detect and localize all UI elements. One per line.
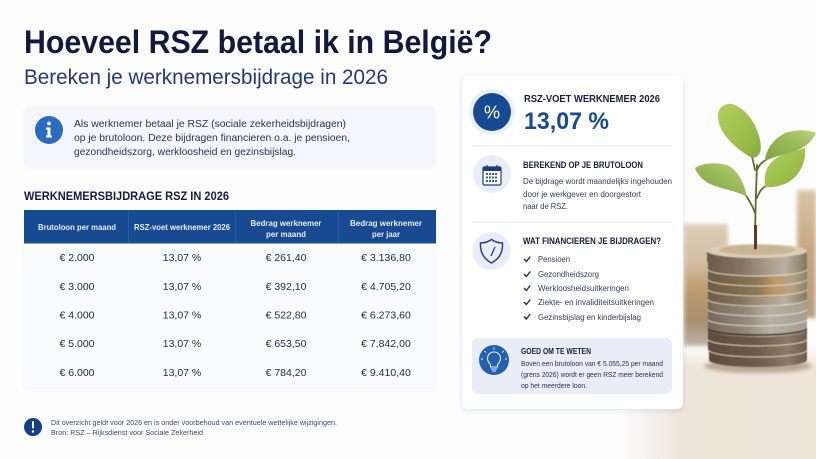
checklist: Werkloosheidsuitkeringen bbox=[538, 283, 629, 293]
row 4000: € 522,80 bbox=[266, 310, 307, 322]
row 6000: € 6.000 bbox=[59, 367, 95, 379]
rate label: RSZ-VOET WERKNEMER 2026 bbox=[524, 94, 661, 105]
row 3000 bbox=[59, 281, 411, 293]
table header: RSZ-voet werknemer 2026 bbox=[134, 222, 230, 232]
row 5000: 13,07 % bbox=[163, 338, 201, 350]
checklist: Gezondheidszorg bbox=[538, 269, 599, 279]
callout text bbox=[521, 359, 663, 390]
block text: De bijdrage wordt maandelijks ingehouden bbox=[523, 176, 672, 186]
callout text: Boven een brutoloon van € 5.055,25 per maand bbox=[521, 359, 663, 368]
funding block bbox=[472, 232, 661, 322]
checklist: Ziekte- en invaliditeitsuitkeringen bbox=[538, 297, 654, 307]
table: werknemersbijdrage bbox=[24, 210, 436, 388]
table header: Bedrag werknemer bbox=[250, 218, 322, 228]
block heading: BEREKEND OP JE BRUTOLOON bbox=[523, 160, 643, 170]
footnote text bbox=[51, 418, 337, 437]
row 2000 bbox=[59, 252, 411, 264]
leaves bbox=[718, 104, 761, 158]
icon: exclamation bbox=[24, 418, 42, 436]
intro text bbox=[74, 118, 350, 158]
row 4000: € 4.000 bbox=[59, 310, 95, 322]
row 5000: € 7.842,00 bbox=[361, 338, 411, 350]
footnote text: Bron: RSZ – Rijksdienst voor Sociale Zekerheid bbox=[51, 428, 203, 437]
block text: naar de RSZ. bbox=[523, 201, 568, 211]
checklist: Gezinsbijslag en kinderbijslag bbox=[538, 312, 641, 322]
table header: per jaar bbox=[372, 229, 401, 239]
row 6000 bbox=[59, 367, 411, 379]
block text: door je werkgever en doorgestort bbox=[523, 189, 642, 199]
seedling stem bbox=[745, 157, 766, 249]
intro text: op je brutoloon. Deze bijdragen financieren o.a. je pensioen, bbox=[74, 132, 350, 144]
callout heading: GOED OM TE WETEN bbox=[521, 347, 591, 356]
intro text: gezondheidszorg, werkloosheid en gezinsbijslag. bbox=[74, 146, 296, 158]
row 5000: € 5.000 bbox=[59, 338, 95, 350]
panel: intro info box bbox=[24, 106, 436, 167]
row 3000: € 4.705,20 bbox=[361, 281, 411, 293]
intro text: Als werknemer betaal je RSZ (sociale zekerheidsbijdragen) bbox=[74, 118, 346, 130]
row 2000: € 261,40 bbox=[266, 252, 307, 264]
row 6000: € 784,20 bbox=[266, 367, 307, 379]
icon: calendar bbox=[473, 155, 511, 193]
icon: percent: % bbox=[484, 102, 500, 122]
callout: good to know bbox=[472, 338, 672, 394]
icon: percent bbox=[469, 89, 515, 135]
row 6000: 13,07 % bbox=[163, 367, 201, 379]
gross salary block bbox=[473, 155, 672, 211]
table rows bbox=[59, 252, 411, 379]
checklist bbox=[524, 254, 654, 322]
row 4000: 13,07 % bbox=[163, 310, 201, 322]
block heading: WAT FINANCIEREN JE BIJDRAGEN? bbox=[523, 236, 661, 246]
table header bbox=[24, 210, 436, 244]
coin stack bbox=[707, 244, 807, 367]
row 5000 bbox=[59, 338, 411, 350]
table header: per maand bbox=[266, 229, 306, 239]
row 4000 bbox=[59, 310, 411, 322]
row 2000: € 2.000 bbox=[59, 252, 95, 264]
row 2000: 13,07 % bbox=[163, 252, 201, 264]
table header: Brutoloon per maand bbox=[38, 222, 116, 232]
block text bbox=[523, 176, 672, 211]
checklist: Pensioen bbox=[538, 254, 570, 264]
row 3000: € 3.000 bbox=[59, 281, 95, 293]
icon: shield bbox=[472, 232, 510, 270]
row 3000: € 392,10 bbox=[266, 281, 307, 293]
row 5000: € 653,50 bbox=[266, 338, 307, 350]
icon: light bulb bbox=[479, 345, 509, 375]
callout text: (grens 2026) wordt er geen RSZ meer berekend bbox=[521, 370, 663, 379]
footnote text: Dit overzicht geldt voor 2026 en is onder voorbehoud van eventuele wettelijke wijzigingen. bbox=[51, 418, 337, 427]
title: Hoeveel RSZ betaal ik in België? bbox=[24, 24, 492, 60]
rate value: 13,07 % bbox=[524, 108, 609, 135]
panel: side card bbox=[462, 76, 683, 409]
row 4000: € 6.273,60 bbox=[361, 310, 411, 322]
row 6000: € 9.410,40 bbox=[361, 367, 411, 379]
footnote bbox=[24, 418, 337, 437]
subtitle: Bereken je werknemersbijdrage in 2026 bbox=[24, 66, 388, 89]
icon: info bbox=[35, 116, 63, 144]
callout text: op het meerdere loon. bbox=[521, 381, 587, 390]
row 2000: € 3.136,80 bbox=[361, 252, 411, 264]
row 3000: 13,07 % bbox=[163, 281, 201, 293]
rate block bbox=[469, 89, 661, 135]
table header: Bedrag werknemer bbox=[350, 218, 423, 228]
table heading: WERKNEMERSBIJDRAGE RSZ IN 2026 bbox=[24, 191, 229, 203]
photo: seedling on coin stack bbox=[620, 104, 816, 459]
